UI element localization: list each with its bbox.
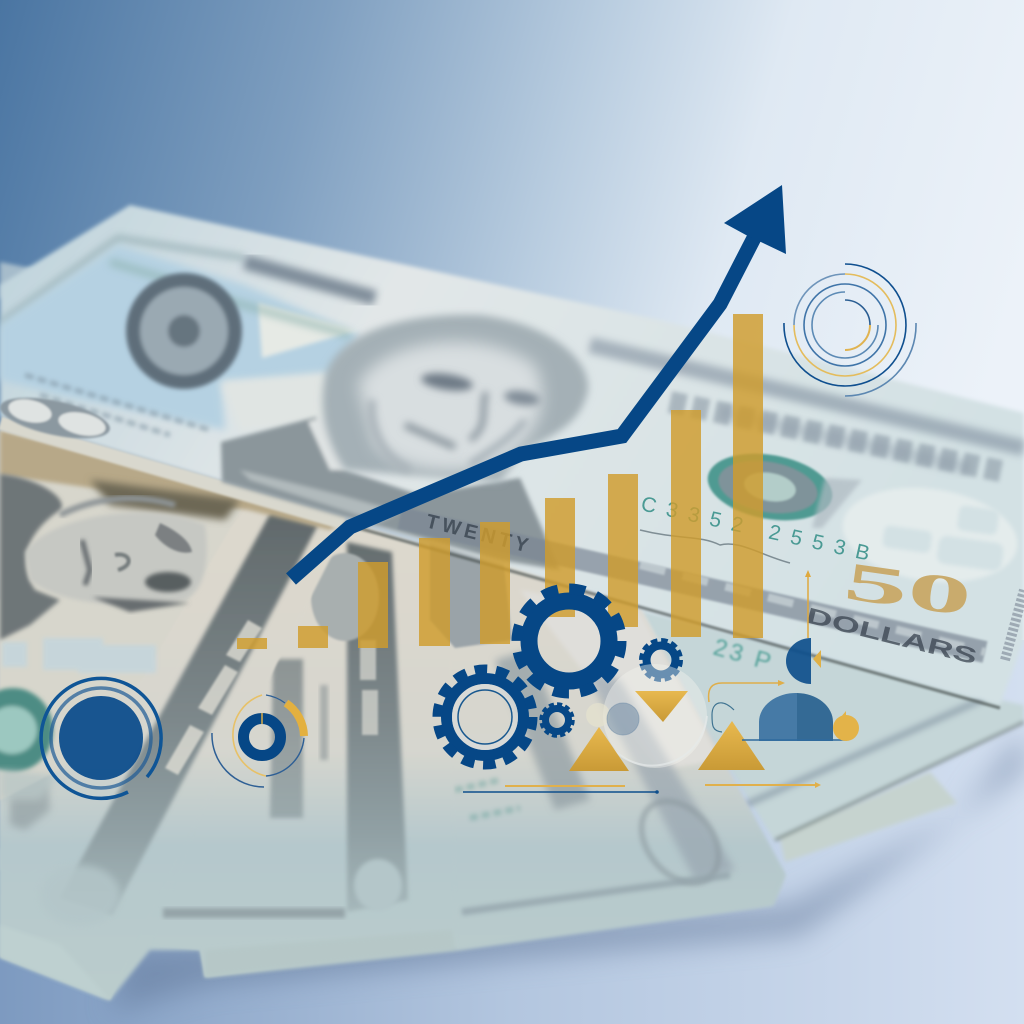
20 figure bbox=[0, 390, 113, 446]
signature bbox=[640, 530, 790, 563]
icon: gold triangles bbox=[569, 691, 765, 771]
bar chart bbox=[237, 314, 763, 649]
icon: donut gauge bbox=[212, 695, 304, 787]
centre note bbox=[150, 530, 512, 977]
baseline rules bbox=[463, 782, 821, 794]
left portrait bbox=[0, 474, 207, 640]
suit bbox=[221, 412, 560, 570]
note text band bbox=[400, 518, 985, 652]
top banknote: DOLLARS bbox=[804, 603, 980, 669]
ghost lettering bbox=[110, 262, 350, 335]
lower base fill bbox=[0, 430, 785, 1000]
icon: half circle with arrows bbox=[709, 570, 821, 732]
blue patch bbox=[0, 245, 360, 430]
growth arrow bbox=[291, 185, 786, 579]
icon: solid target left bbox=[41, 678, 161, 798]
icon: glass circle and discs bbox=[586, 664, 707, 768]
icon: small gear centre bbox=[542, 704, 572, 736]
icon: small gear right bbox=[642, 640, 680, 680]
icon: dome with gold ball bbox=[742, 693, 859, 741]
pale printing block bbox=[2, 638, 156, 673]
bottom-left note strips bbox=[0, 495, 345, 1000]
upper dark band bbox=[245, 262, 375, 298]
left portrait note bbox=[0, 430, 345, 800]
green seal bbox=[702, 445, 838, 529]
gold 50: 50 bbox=[840, 550, 975, 628]
upper right text block bbox=[670, 402, 1005, 472]
portrait head bbox=[323, 315, 588, 482]
photo: stack of banknotes bbox=[0, 205, 1024, 1012]
green seal left bbox=[0, 688, 53, 772]
centre-right note bbox=[445, 540, 785, 950]
soft note shadows bbox=[110, 730, 1024, 1012]
icon: left gear bbox=[438, 670, 532, 764]
icon: concentric rings top right bbox=[784, 264, 916, 396]
back note left peek bbox=[0, 262, 40, 300]
top banknote bbox=[0, 205, 1024, 708]
serial number: C3352 2553B bbox=[639, 492, 882, 568]
serial on lower note: 23 P bbox=[710, 634, 777, 677]
denomination: TWENTY bbox=[424, 511, 534, 558]
icon: large gear bbox=[517, 589, 621, 693]
pale window bbox=[836, 477, 1024, 593]
back note right bbox=[640, 610, 1024, 862]
treasury seal bbox=[126, 273, 242, 389]
